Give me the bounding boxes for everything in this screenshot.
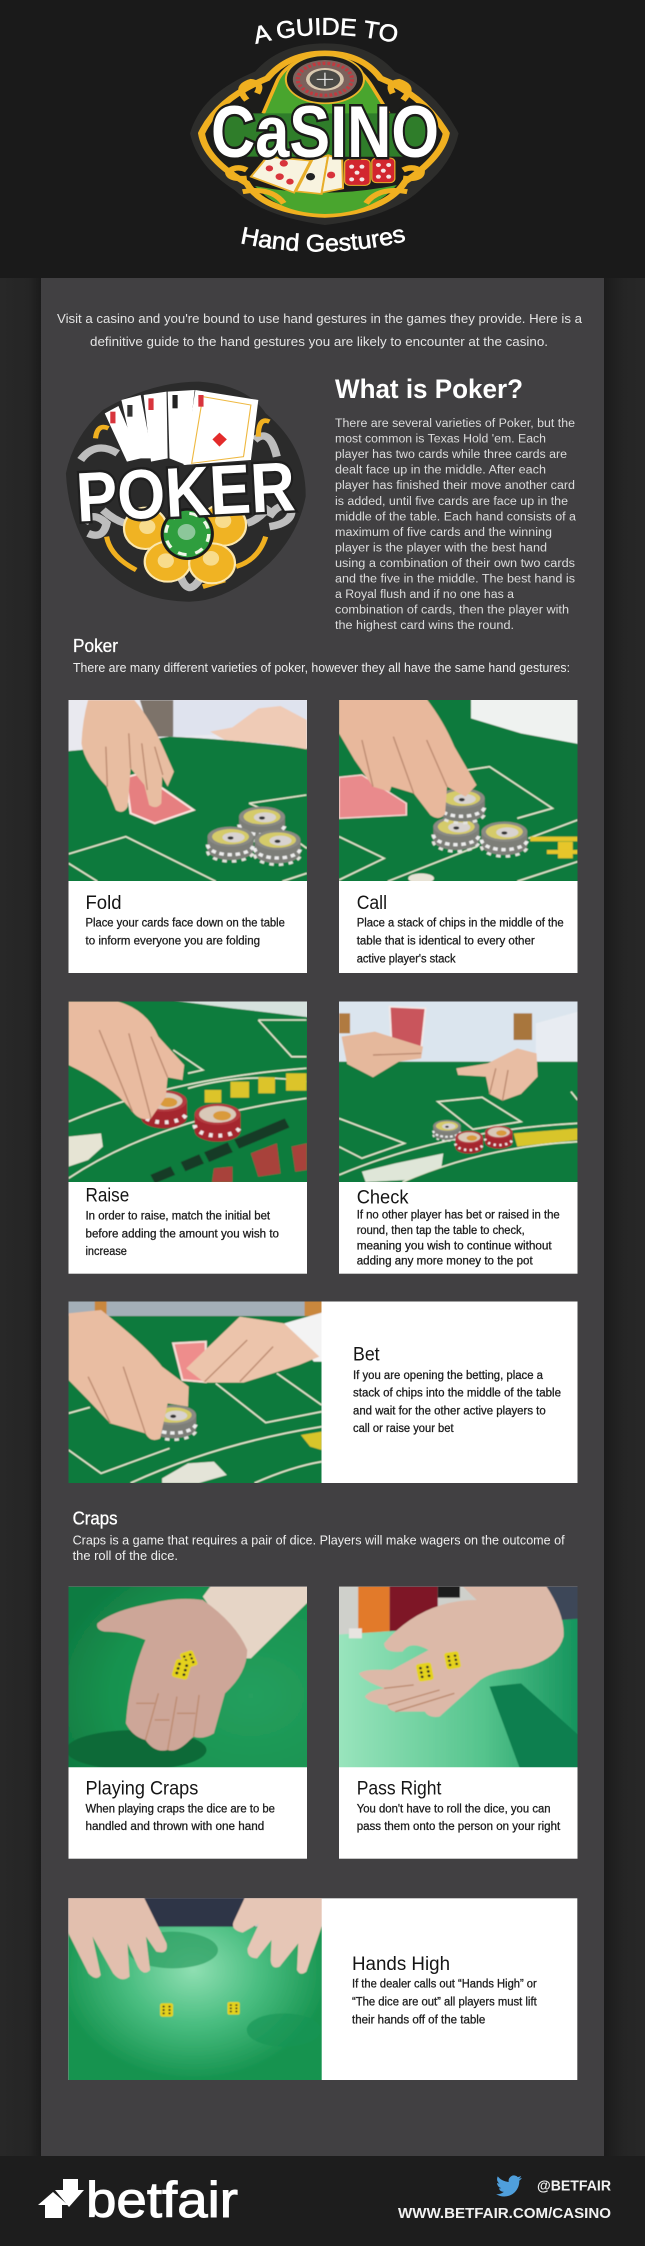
panel: Bet	[62, 1297, 577, 1488]
heading: Craps section: Craps	[73, 1508, 118, 1528]
panel: Playing Craps	[62, 1582, 314, 1859]
description: You don't have to roll the dice, you can	[357, 1801, 551, 1815]
text block: what is poker description: dealt face up in the middle. After each	[335, 465, 546, 477]
description: “The dice are out” all players must lift	[352, 1994, 537, 2008]
text block: what is poker description: using a combination of their own two cards	[335, 558, 575, 570]
playing cards	[251, 155, 343, 194]
panel: main content background	[41, 278, 604, 2156]
description	[86, 1209, 279, 1258]
subtitle: Hand Gestures: Hand Gestures	[241, 226, 406, 252]
text block: what is poker description: most common is Texas Hold 'em. Each	[335, 434, 546, 446]
heading: What is Poker?: What is Poker?	[335, 374, 523, 404]
photo: pass right	[332, 1582, 584, 1772]
text block: what is poker description: combination of cards, then the player with	[335, 605, 569, 617]
intro text: Visit a casino and you're bound to use hand gestures in the games they provide. Here is a	[57, 311, 583, 326]
header band	[0, 0, 645, 278]
description: their hands off of the table	[352, 2012, 485, 2026]
description: before adding the amount you wish to	[86, 1226, 279, 1240]
description: handled and thrown with one hand	[86, 1819, 264, 1833]
description: table that is identical to every other	[357, 934, 535, 948]
description: Place a stack of chips in the middle of the	[357, 916, 564, 930]
description: to inform everyone you are folding	[86, 934, 260, 948]
intro text	[57, 311, 583, 349]
panel: Hands High	[62, 1893, 577, 2083]
panel: Pass Right	[332, 1582, 584, 1859]
title: Fold	[86, 893, 122, 914]
description: round, then tap the table to check,	[357, 1223, 525, 1237]
text: craps section intro	[73, 1534, 565, 1563]
photo: fold	[62, 697, 314, 887]
title: Bet	[353, 1345, 380, 1366]
description: When playing craps the dice are to be	[86, 1801, 275, 1815]
description	[86, 1801, 275, 1833]
logo word: Casino: CaSINO	[211, 92, 439, 173]
description: If the dealer calls out “Hands High” or	[352, 1977, 537, 1991]
text block: what is poker description: There are several varieties of Poker, but the	[335, 418, 575, 430]
description: call or raise your bet	[353, 1421, 454, 1435]
description	[357, 1801, 561, 1833]
description: active player's stack	[357, 951, 456, 965]
text block: what is poker description: maximum of five cards and the winning	[335, 527, 552, 539]
photo: bet	[62, 1297, 329, 1488]
description	[357, 1208, 560, 1268]
description: meaning you wish to continue without	[357, 1238, 552, 1252]
description	[353, 1368, 561, 1435]
text block: what is poker description: middle of the table. Each hand consists of a	[335, 511, 577, 523]
text block: what is poker description: player is the player with the best hand	[335, 542, 547, 554]
red dice	[345, 158, 395, 185]
roulette wheel	[286, 55, 364, 103]
description	[357, 916, 564, 965]
photo: raise	[62, 997, 314, 1187]
text: poker section intro: There are many different varieties of poker, however they all have the same hand gestures:	[73, 661, 570, 675]
title: Call	[357, 893, 387, 914]
description: Place your cards face down on the table	[86, 916, 285, 930]
text block: what is poker description: player has two cards while three cards are	[335, 449, 567, 461]
description: adding any more money to the pot	[357, 1254, 533, 1268]
panel: Call	[332, 697, 584, 973]
casino logo badge	[190, 43, 459, 225]
footer band	[0, 2156, 645, 2246]
title: Hands High	[352, 1954, 450, 1975]
text: craps section intro: the roll of the dice.	[73, 1549, 178, 1563]
text: craps section intro: Craps is a game that requires a pair of dice. Players will make wagers on the outcome of	[73, 1534, 565, 1548]
betfair logo: betfair	[86, 2172, 238, 2228]
logo word: Poker: POKER	[74, 447, 297, 537]
heading: Poker section: Poker	[73, 636, 118, 656]
text block: what is poker description: the highest card wins the round.	[335, 620, 514, 632]
icon: twitter bird	[496, 2175, 522, 2196]
betfair logo	[38, 2172, 238, 2228]
title: Playing Craps	[86, 1778, 198, 1799]
description: pass them onto the person on your right	[357, 1819, 561, 1833]
title: Check	[357, 1187, 409, 1208]
text block: what is poker description: and the five in the middle. The best hand is	[335, 574, 575, 586]
description: In order to raise, match the initial bet	[86, 1209, 271, 1223]
text block: what is poker description: player has finished their move another card	[335, 480, 575, 492]
text block: what is poker description	[335, 418, 577, 632]
description: If no other player has bet or raised in the	[357, 1208, 560, 1222]
photo: check	[332, 997, 584, 1187]
title: Pass Right	[357, 1778, 442, 1799]
panel: Check	[332, 997, 584, 1274]
text block: what is poker description: a Royal flush and if no one has a	[335, 589, 515, 601]
description: increase	[86, 1244, 127, 1258]
photo: hands high	[62, 1893, 329, 2083]
poker chips	[124, 504, 246, 583]
title: A Guide To: A GUIDE TO	[255, 18, 398, 44]
panel: Fold	[62, 697, 314, 973]
description	[352, 1977, 537, 2026]
poker logo badge	[66, 382, 306, 602]
description: stack of chips into the middle of the table	[353, 1386, 561, 1400]
description: If you are opening the betting, place a	[353, 1368, 543, 1382]
description	[86, 916, 285, 948]
website url: WWW.BETFAIR.COM/CASINO	[398, 2205, 611, 2222]
title: Raise	[86, 1186, 129, 1207]
intro text: definitive guide to the hand gestures you are likely to encounter at the casino.	[90, 334, 548, 349]
panel: Raise	[62, 997, 314, 1274]
photo: call	[332, 697, 584, 887]
description: and wait for the other active players to	[353, 1403, 546, 1417]
text block: what is poker description: is added, until five cards are face up in the	[335, 496, 568, 508]
fan of cards	[105, 390, 258, 465]
twitter handle: @BETFAIR	[537, 2178, 611, 2195]
photo: playing craps	[62, 1582, 314, 1772]
